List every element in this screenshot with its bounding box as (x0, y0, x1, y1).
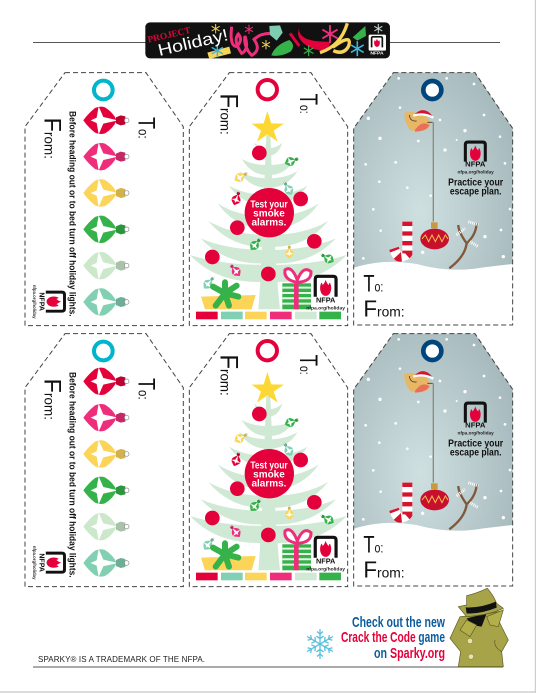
panel: tag 3 escape plan (354, 73, 513, 325)
ornaments column (83, 367, 129, 577)
NFPA logo: NFPA (316, 295, 336, 304)
NFPA logo: nfpa.org/holiday (32, 285, 37, 319)
panel: tag 2 smoke alarm tree (189, 73, 348, 326)
panel: tag 3 escape plan, second row (354, 334, 513, 586)
reminder text: Before heading out or to bed turn off holiday lights. (67, 111, 77, 317)
yellow present (201, 543, 256, 570)
panel: tag 2 smoke alarm tree, second row (189, 334, 348, 587)
NFPA logo (306, 537, 345, 572)
snow dots (362, 77, 511, 260)
NFPA logo: nfpa.org/holiday (458, 430, 494, 435)
reminder text: Before heading out or to bed turn off holiday lights. (67, 372, 77, 578)
escape plan message: escape plan. (450, 448, 502, 459)
winter branch (449, 222, 478, 268)
to label: To: (132, 378, 159, 400)
banner wordmark: PROJECT (147, 26, 193, 46)
smoke alarm message: alarms. (251, 218, 287, 229)
escape plan message: Practice your (448, 178, 503, 189)
header banner: Project Holiday: Holiday! (156, 25, 230, 60)
to label: To: (363, 271, 383, 298)
red baubles (205, 407, 322, 542)
NFPA logo (32, 546, 64, 580)
smoke alarm message: smoke (253, 470, 285, 481)
colour bars (196, 573, 341, 580)
escape plan message: escape plan. (450, 187, 502, 198)
smoke alarm message (245, 449, 294, 498)
header banner: Project Holiday (145, 22, 390, 60)
smoke alarm message: Test your (250, 200, 288, 211)
green present (282, 269, 311, 309)
promo text: Check out the new (352, 614, 445, 631)
to label: To: (363, 532, 383, 559)
NFPA logo: nfpa.org/holiday (306, 305, 345, 311)
panel: tag 1 light safety (25, 73, 183, 326)
hanging ornament (420, 222, 449, 249)
panel: tag 1 light safety, second row (25, 334, 183, 587)
icon: snowflake (305, 629, 335, 659)
header banner: Project Holiday: NFPA (370, 51, 384, 57)
NFPA logo (458, 403, 494, 435)
from label: From: (363, 557, 405, 583)
escape plan message (448, 439, 503, 459)
trademark note: SPARKY® IS A TRADEMARK OF THE NFPA. (38, 655, 205, 664)
from label: From: (363, 296, 405, 322)
candy cane (394, 222, 407, 257)
smoke alarm message: alarms. (251, 479, 287, 490)
to label: To: (132, 117, 159, 139)
NFPA logo: nfpa.org/holiday (306, 566, 345, 572)
snow dots (362, 338, 511, 521)
escape plan message (448, 178, 503, 198)
yellow present (201, 282, 256, 309)
small ornaments (201, 154, 336, 291)
bird (404, 110, 433, 132)
NFPA logo: nfpa.org/holiday (458, 169, 494, 174)
NFPA logo: NFPA (316, 556, 336, 565)
NFPA logo (306, 276, 345, 311)
from label: F rom: (39, 118, 66, 159)
bird (404, 371, 433, 393)
ornaments column (83, 106, 129, 316)
hanging ornament (420, 483, 449, 510)
smoke alarm message (245, 188, 294, 237)
promo text (341, 614, 445, 662)
header rule (33, 42, 500, 44)
NFPA logo: NFPA (465, 421, 486, 430)
to label: To: (294, 355, 322, 375)
from label: F rom: (214, 354, 242, 396)
tree (190, 135, 347, 309)
NFPA logo: NFPA (38, 292, 45, 311)
star (252, 111, 284, 142)
candy cane (394, 483, 407, 518)
string (431, 383, 435, 483)
snow ground (354, 523, 513, 586)
star (252, 372, 284, 403)
promo text: on Sparky.org (374, 645, 445, 662)
winter branch (449, 483, 478, 529)
from label: F rom: (39, 379, 66, 420)
NFPA logo (458, 142, 494, 174)
smoke alarm message: Test your (250, 461, 288, 472)
NFPA logo (32, 285, 64, 319)
small ornaments (201, 415, 336, 552)
to label: To: (294, 94, 322, 114)
tree (190, 396, 347, 570)
NFPA logo: nfpa.org/holiday (32, 546, 37, 580)
promo text: Crack the Code game (341, 629, 445, 646)
detective Sparky (450, 588, 508, 667)
from label: F rom: (214, 93, 242, 135)
red baubles (205, 146, 322, 281)
green present (282, 530, 311, 570)
NFPA logo: NFPA (38, 553, 45, 572)
escape plan message: Practice your (448, 439, 503, 450)
snow ground (354, 262, 513, 325)
colour bars (196, 312, 341, 319)
NFPA logo: NFPA (465, 160, 486, 169)
string (431, 122, 435, 222)
smoke alarm message: smoke (253, 209, 285, 220)
footer rule (33, 666, 503, 668)
